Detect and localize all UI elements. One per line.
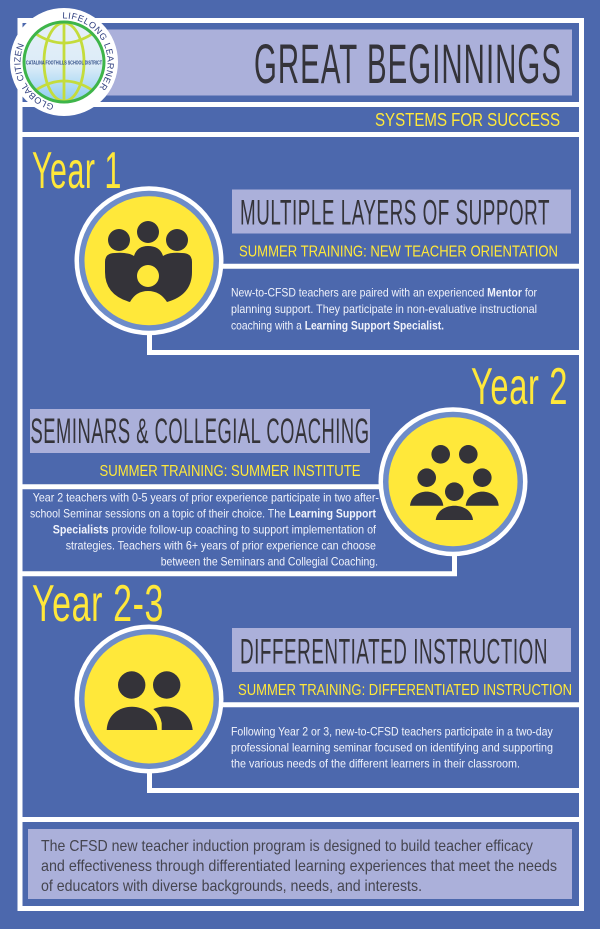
icon: group with mentor bbox=[74, 186, 224, 335]
year 2-3 label: Year 2-3 bbox=[32, 575, 164, 633]
year 1 body text: New-to-CFSD teachers are paired with an experienced Mentor for bbox=[231, 286, 537, 300]
logo: GLOBAL CITIZEN bbox=[14, 43, 53, 110]
logo: LIFELONG LEARNER bbox=[63, 12, 114, 90]
year 1 label: Year 1 bbox=[32, 142, 122, 200]
icon: five people bbox=[378, 407, 528, 556]
panel: year 2-3 bbox=[32, 575, 572, 774]
year 2-3 body text: the various needs of the different learners in their classroom. bbox=[231, 756, 520, 770]
year 2-3 body text bbox=[231, 724, 553, 770]
title band bbox=[90, 30, 572, 96]
year 1 body text: coaching with a Learning Support Specialist. bbox=[231, 318, 444, 332]
year 2 body text: strategies. Teachers with 6+ years of prior experience can choose bbox=[66, 539, 376, 553]
year 2 body text: school Seminar sessions on a topic of their choice. The Learning Support bbox=[30, 507, 376, 521]
panel: summary: The CFSD new teacher induction program is designed to build teacher efficacy bbox=[41, 838, 533, 855]
year 2 summer training: SUMMER TRAINING: SUMMER INSTITUTE bbox=[100, 463, 360, 480]
year 2-3 body text: professional learning seminar focused on identifying and supporting bbox=[231, 741, 553, 755]
logo: CATALINA FOOTHILLS SCHOOL DISTRICT bbox=[26, 60, 103, 66]
panel: year 2 bbox=[30, 358, 568, 569]
year 2 heading bbox=[30, 409, 370, 453]
year 2 body text: Specialists provide follow-up coaching to support implementation of bbox=[53, 523, 377, 537]
year 2 body text: Year 2 teachers with 0-5 years of prior experience participate in two after- bbox=[33, 491, 379, 505]
year 2 body text bbox=[30, 491, 379, 569]
year 2 body text: between the Seminars and Collegial Coaching. bbox=[161, 555, 378, 569]
year 1 body text: planning support. They participate in non-evaluative instructional bbox=[231, 302, 537, 316]
panel: summary: of educators with diverse backgrounds, needs, and interests. bbox=[41, 878, 422, 895]
panel: summary bbox=[28, 829, 572, 899]
subtitle: SYSTEMS FOR SUCCESS bbox=[375, 110, 560, 130]
year 1 body text bbox=[231, 286, 537, 332]
year 2-3 body text: Following Year 2 or 3, new-to-CFSD teachers participate in a two-day bbox=[231, 724, 553, 738]
panel: year 1 bbox=[32, 142, 571, 335]
icon: two people bbox=[74, 624, 224, 774]
logo bbox=[10, 8, 118, 116]
